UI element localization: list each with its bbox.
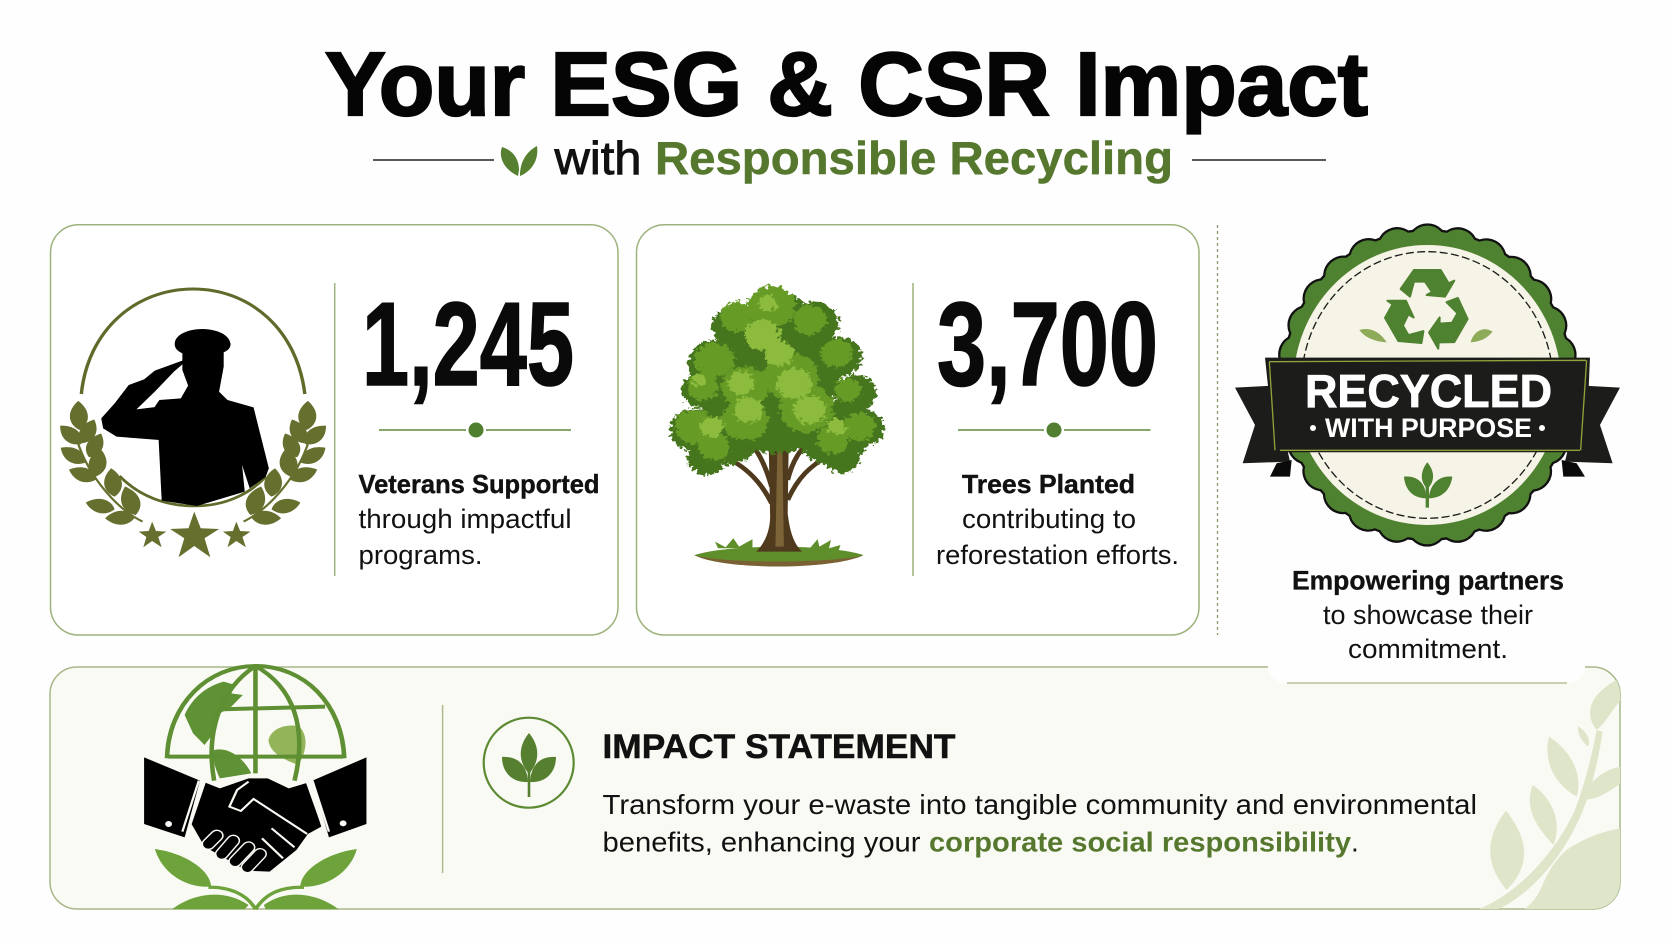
impact body text: Transform your e-waste into tangible community and environmental: [602, 789, 1477, 820]
badge caption: commitment.: [1348, 634, 1508, 664]
title: Your ESG & CSR Impact: [325, 35, 1368, 135]
icon: saluting soldier with laurel wreath: [55, 289, 332, 557]
ribbon: [1235, 358, 1620, 477]
ribbon text: WITH PURPOSE: [1325, 413, 1532, 443]
impact body text: corporate social responsibility: [929, 826, 1351, 858]
sprout: [1404, 462, 1452, 508]
impact body text: benefits, enhancing your: [602, 826, 920, 858]
icon: tree: [670, 286, 884, 567]
trees description: contributing to: [962, 504, 1136, 534]
subtitle: [373, 132, 1326, 184]
divider with dot: [379, 420, 571, 440]
panel: trees card: [636, 225, 1199, 635]
impact heading: IMPACT STATEMENT: [602, 728, 956, 766]
impact body text: .: [1351, 826, 1359, 858]
subtitle: Responsible Recycling: [655, 132, 1173, 184]
badge caption: [1292, 566, 1564, 664]
trees description: reforestation efforts.: [936, 540, 1179, 570]
badge: recycled with purpose: [1235, 229, 1620, 664]
veterans description: programs.: [358, 540, 482, 570]
icon: globe and handshake with leaves: [144, 666, 366, 909]
ribbon text: RECYCLED: [1305, 365, 1552, 417]
ribbon text: [1305, 365, 1552, 443]
panel: veterans card: [50, 225, 618, 635]
trees description: [936, 469, 1179, 570]
icon: recycling arrows: [1378, 270, 1474, 354]
panel: impact statement: [50, 660, 1621, 910]
subtitle: with: [553, 132, 642, 184]
stat: 1,245: 1,245: [362, 278, 574, 411]
veterans description: Veterans Supported: [358, 469, 600, 499]
trees description: Trees Planted: [962, 469, 1135, 499]
white notch behind caption: [1268, 660, 1585, 684]
badge caption: to showcase their: [1323, 600, 1533, 630]
stat: 3,700: 3,700: [937, 278, 1158, 411]
badge caption: Empowering partners: [1292, 566, 1564, 596]
icon: sprout in circle: [484, 718, 574, 808]
divider with dot: [958, 420, 1150, 440]
veterans description: through impactful: [358, 504, 572, 534]
veterans description: [358, 469, 600, 570]
impact body text: [602, 789, 1477, 858]
decorative leaf watermark: [1477, 678, 1621, 910]
